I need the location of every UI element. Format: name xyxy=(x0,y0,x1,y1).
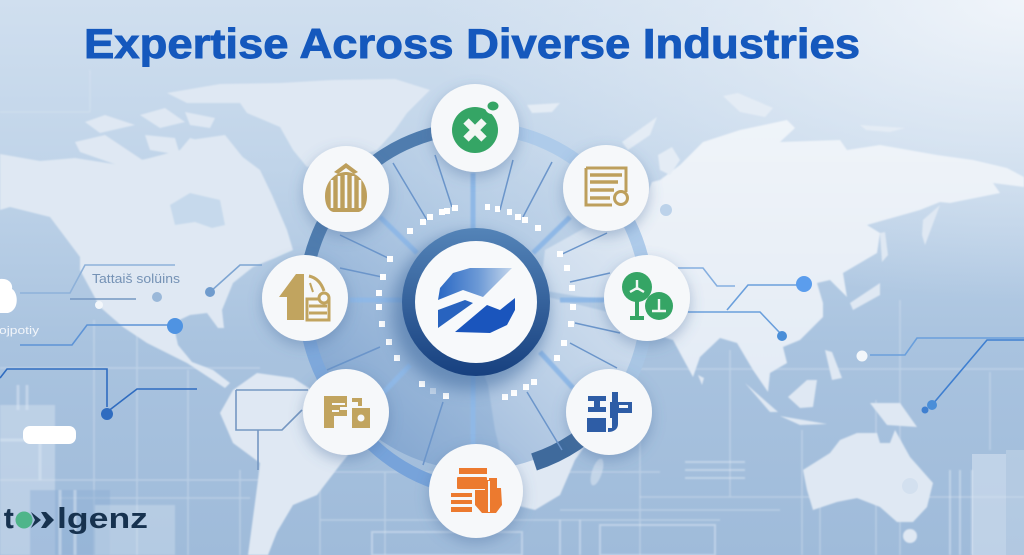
icon card: left-bottom gold glyph xyxy=(303,369,389,455)
title: Expertise Across Diverse Industries xyxy=(84,20,860,67)
south america xyxy=(220,373,352,555)
central ring xyxy=(402,228,550,376)
hub disc xyxy=(308,134,644,470)
central logo xyxy=(438,268,515,333)
kamchatka xyxy=(922,205,940,245)
thin spokes xyxy=(327,155,620,465)
icon card: left-top building xyxy=(303,146,389,232)
central ring shadow xyxy=(392,234,548,390)
hub: central diagram xyxy=(305,128,647,491)
hudson bay xyxy=(170,193,225,228)
southeast asia islands xyxy=(698,232,917,427)
icon card: right-top document xyxy=(563,145,649,231)
white pill xyxy=(23,426,76,444)
large segmented ring xyxy=(305,128,647,491)
city silhouette left xyxy=(0,385,175,555)
arctic islands xyxy=(75,108,245,166)
icon card: right trees xyxy=(604,255,690,341)
connector lines right xyxy=(678,268,1024,405)
greenland xyxy=(167,79,430,167)
northern islets xyxy=(527,93,905,175)
icon card: right-bottom blue glyph xyxy=(566,369,652,455)
connector lines left xyxy=(0,265,308,470)
madagascar xyxy=(588,457,606,487)
map nodes left xyxy=(95,287,215,420)
white dashes xyxy=(376,204,576,400)
brand logo: t xyxy=(4,503,14,535)
small label: solutions: Tattaiš solüins xyxy=(92,272,180,286)
map nodes right xyxy=(660,204,937,494)
cloud icon xyxy=(0,279,17,313)
central white disc xyxy=(415,241,537,363)
brand logo: lgenz xyxy=(57,503,148,535)
eurasia xyxy=(540,120,1024,392)
australia xyxy=(803,430,933,522)
thick spokes xyxy=(350,173,605,445)
africa xyxy=(478,290,640,510)
brand logo xyxy=(4,503,148,535)
north america xyxy=(0,138,293,388)
icon card: left house xyxy=(262,255,348,341)
icon card: top green xyxy=(431,84,519,172)
icon card: bottom orange xyxy=(429,444,523,538)
city silhouette centre and right xyxy=(372,462,972,555)
